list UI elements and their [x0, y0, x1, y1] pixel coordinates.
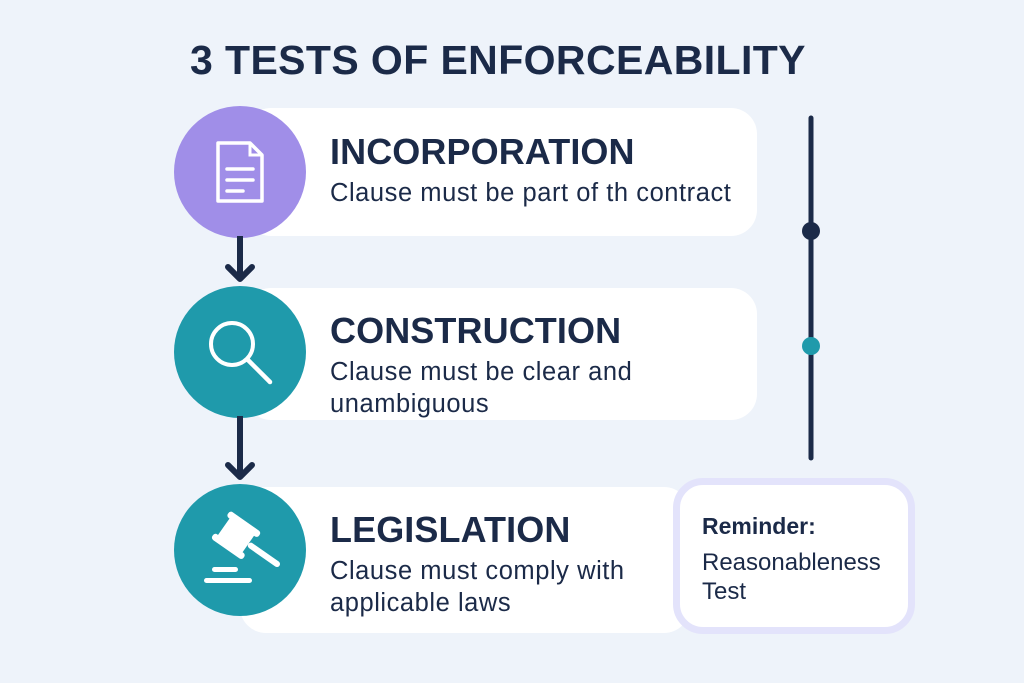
arrow 2	[225, 416, 255, 480]
text: construction desc: unambiguous	[330, 390, 489, 418]
heading: incorporation: INCORPORATION	[330, 131, 635, 172]
timeline line with markers	[802, 116, 820, 460]
heading: legislation: LEGISLATION	[330, 509, 570, 550]
callout: reminder: Reasonableness	[702, 549, 881, 576]
text: legislation desc: Clause must comply with	[330, 557, 625, 585]
panel: legislation card	[240, 487, 690, 633]
icon: gavel circle	[174, 484, 306, 616]
panel: construction card	[245, 288, 757, 420]
text: construction desc: Clause must be clear and	[330, 358, 632, 386]
text: legislation desc	[330, 557, 625, 617]
callout: reminder: Test	[702, 578, 746, 605]
text: legislation desc: applicable laws	[330, 589, 511, 617]
panel: incorporation card	[245, 108, 757, 236]
callout: reminder	[673, 478, 915, 634]
text: incorporation desc: Clause must be part of th contract	[330, 179, 731, 207]
arrow 1	[225, 236, 255, 282]
text: construction desc	[330, 358, 632, 418]
icon: document circle	[174, 106, 306, 238]
icon: magnifier circle	[174, 286, 306, 418]
title: 3 TESTS OF ENFORCEABILITY	[190, 37, 806, 83]
heading: construction: CONSTRUCTION	[330, 310, 621, 351]
callout: reminder: Reminder:	[702, 513, 816, 539]
